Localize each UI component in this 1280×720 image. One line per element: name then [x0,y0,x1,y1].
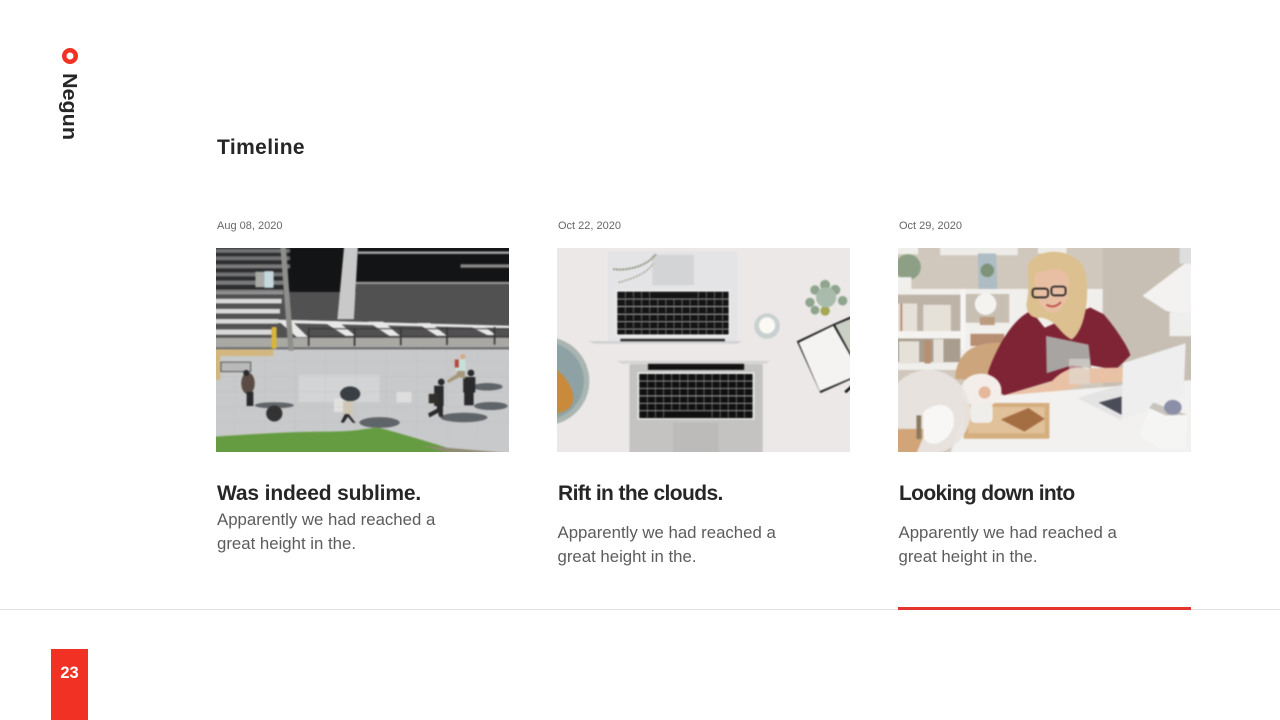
page number badge: 23 [60,664,79,682]
title: Timeline [217,136,305,159]
photo: two laptops on desk [557,248,850,452]
photo: street pedestrians [216,248,509,452]
date 2: Oct 22, 2020 [558,220,621,232]
page number badge [51,649,88,720]
card text 3: Apparently we had reached a [898,523,1117,542]
card text 1 [217,510,436,553]
card heading 3: Looking down into [899,482,1075,505]
timeline base line [0,609,1280,610]
card heading 1: Was indeed sublime. [217,482,421,505]
card text 3: great height in the. [898,547,1038,566]
card text 2: great height in the. [558,547,697,566]
card text 1: Apparently we had reached a [217,510,435,529]
card text 3 [898,523,1117,566]
card text 2 [558,523,776,566]
card text 1: great height in the. [217,534,356,553]
timeline progress marker [898,607,1191,610]
brand logo dot [62,48,78,64]
card heading 2: Rift in the clouds. [558,482,723,505]
photo: woman at desk with laptop [898,248,1191,452]
date 1: Aug 08, 2020 [217,220,282,232]
date 3: Oct 29, 2020 [899,220,962,232]
card text 2: Apparently we had reached a [558,523,776,542]
